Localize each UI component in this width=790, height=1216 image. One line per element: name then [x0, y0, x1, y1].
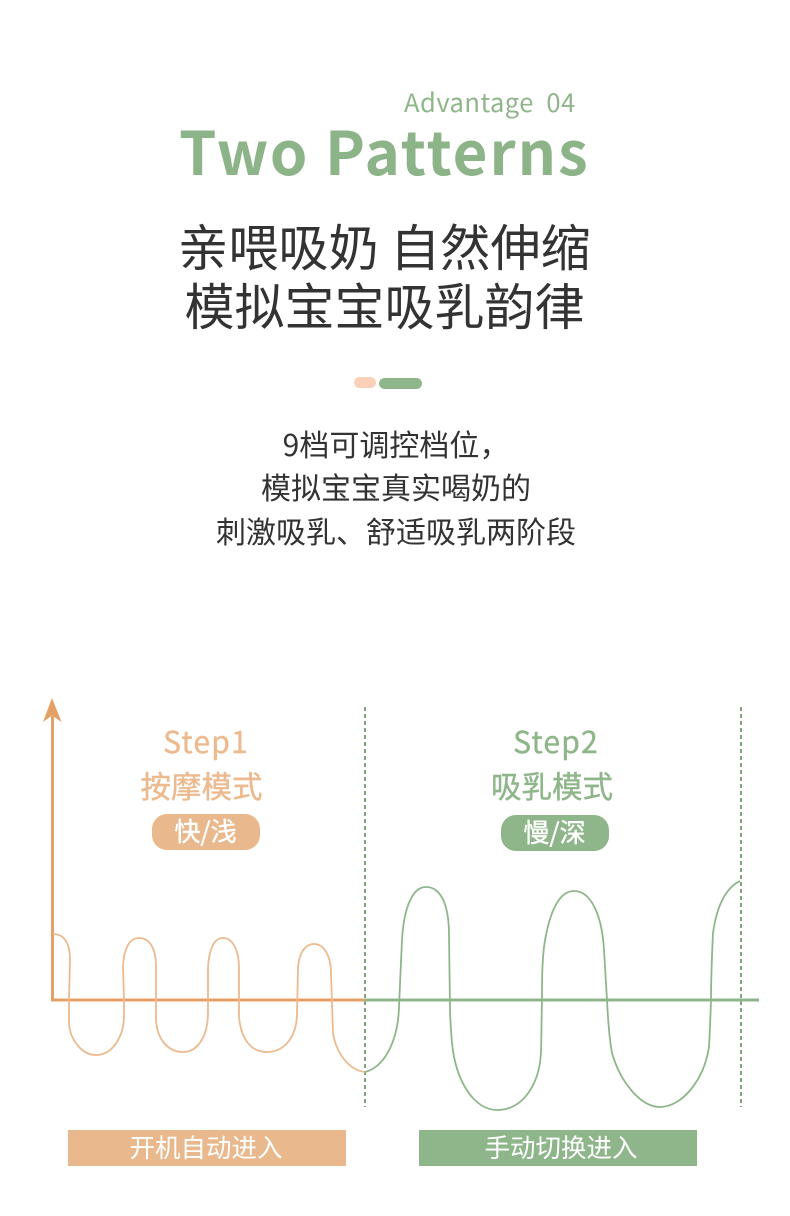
step 1 title: Step1: [163, 718, 249, 762]
divider pill: [354, 377, 422, 389]
orange wave: [53, 934, 365, 1072]
advantage label: Advantage 04: [404, 83, 576, 120]
step 2 labels: [491, 718, 613, 851]
step 2 mode name: 吸乳模式: [491, 763, 613, 807]
step 1 labels: [140, 718, 262, 850]
description line 3: 刺激吸乳、舒适吸乳两阶段: [216, 508, 576, 552]
headline line 2: 模拟宝宝吸乳韵律: [184, 268, 584, 340]
y axis arrow head: [43, 698, 62, 722]
headline: [178, 209, 591, 340]
description line 2: 模拟宝宝真实喝奶的: [261, 464, 531, 508]
description line 1: 9档可调控档位，: [283, 421, 509, 465]
baseline: green segment: [365, 998, 759, 1002]
step 2 entry bar: [419, 1128, 697, 1166]
header: advantage label and title: [179, 83, 590, 193]
title: Two Patterns: [179, 106, 590, 193]
description text: [216, 421, 576, 552]
step 1 entry bar: [68, 1128, 346, 1166]
headline line 1: 亲喂吸奶 自然伸缩: [178, 209, 591, 281]
y axis: [51, 716, 54, 1001]
step 2 dashed boundary: [740, 707, 742, 1107]
step 1 entry bar: 开机自动进入: [129, 1128, 283, 1165]
step 2 title: Step2: [513, 718, 599, 762]
step 1 dashed boundary: [364, 707, 366, 1107]
baseline: orange segment: [51, 998, 365, 1002]
step 2 entry bar: 手动切换进入: [484, 1128, 638, 1165]
step 1 mode name: 按摩模式: [140, 763, 262, 807]
step 2 speed pill: 慢/深: [523, 813, 586, 850]
step 1 speed pill: 快/浅: [174, 812, 237, 849]
green wave: [365, 881, 740, 1110]
chart: [43, 698, 759, 1110]
